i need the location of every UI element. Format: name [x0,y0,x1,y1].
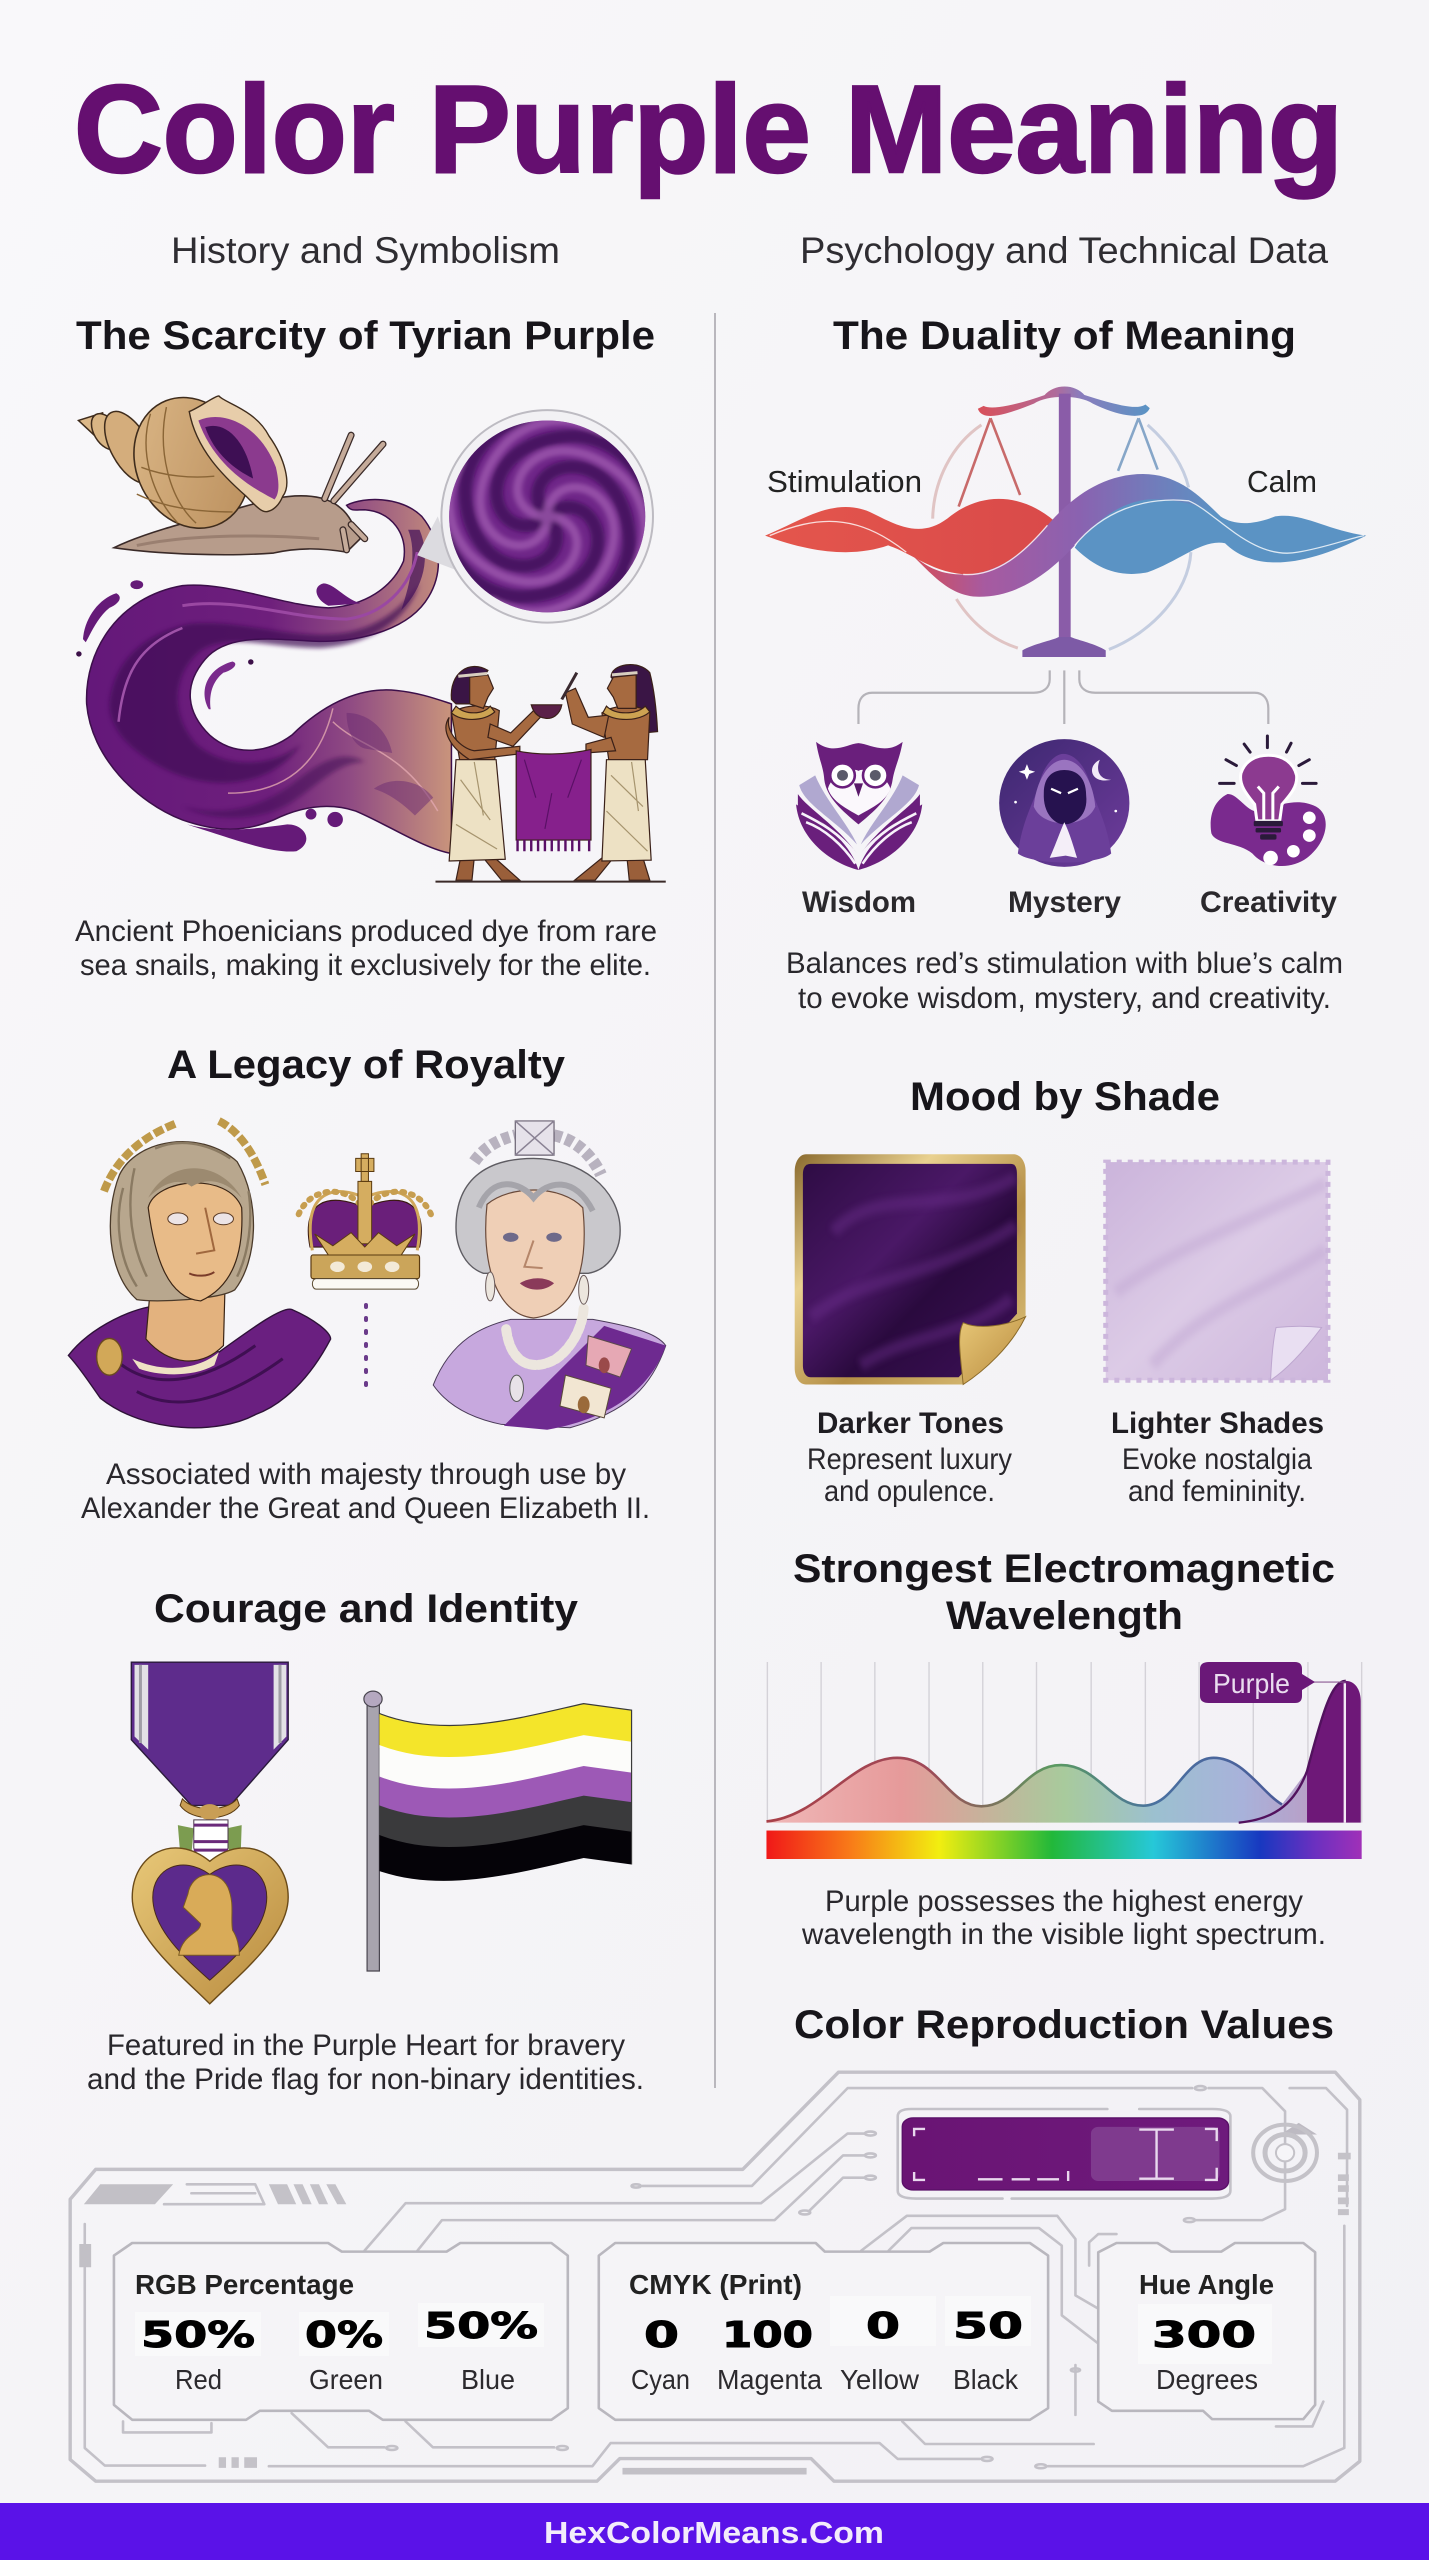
caption: lighter shades: Evoke nostalgia [1122,1443,1312,1476]
card label: RGB Percentage [135,2269,354,2300]
value: cyan: 0 [644,2315,679,2356]
card: hue angle [1098,2243,1315,2419]
display: purple swatch screen [902,2118,1229,2190]
heading: mood: Mood by Shade [910,1075,1220,1119]
heading: wavelength line 2: Wavelength [946,1594,1183,1638]
caption: darker tones: Represent luxury [807,1443,1012,1476]
body text: Phoenicians: Ancient Phoenicians produced dye from rare [75,915,657,948]
body text: balance: Balances red’s stimulation with blue’s calm [786,947,1343,980]
heading: royalty: A Legacy of Royalty [167,1043,566,1087]
purple cloth [516,749,591,851]
card outline [1098,2243,1315,2419]
card outline [114,2243,568,2420]
value: hue: Degrees [1156,2364,1258,2395]
callout: purple label: Purple [1213,1668,1290,1699]
value: blue: 50% [424,2306,538,2347]
icon: bulb and palette (creativity) [1211,736,1326,866]
purple band [906,474,1220,597]
connectors to traits [858,670,1268,724]
value: blue: Blue [461,2364,515,2395]
illustration: Queen Elizabeth II [433,1121,666,1430]
heading: duality: The Duality of Meaning [833,314,1296,358]
bowl [531,705,562,718]
caption: darker tones [807,1407,1012,1508]
panel: wavelength [766,1547,1362,1951]
value: yellow: 0 [866,2306,900,2347]
value: magenta: 100 [722,2315,813,2356]
card: RGB percentage [114,2243,568,2420]
card outline [599,2243,1048,2420]
chart: visible spectrum curve [766,1662,1362,1859]
ground line [435,881,666,883]
value: red: Red [175,2364,222,2395]
magnified dye swatch [417,409,654,624]
swatch: light [1106,1162,1328,1380]
value: green [299,2312,389,2395]
heading: wavelength: Strongest Electromagnetic [793,1547,1335,1591]
panel: color reproduction values [70,2003,1360,2481]
card: CMYK [599,2243,1048,2420]
value: green: Green [309,2364,383,2395]
caption: lighter shades: Lighter Shades [1111,1407,1324,1440]
icon: crown [299,1154,431,1289]
body text: Phoenicians: sea snails, making it exclusively for the elite. [80,949,651,982]
illustration: snail, dye and Phoenicians [76,380,676,882]
value: cyan: Cyan [631,2364,690,2395]
heading: scarcity: The Scarcity of Tyrian Purple [76,314,655,358]
value: hue: 300 [1152,2315,1256,2356]
value: black [945,2296,1031,2395]
snail [78,380,383,555]
icon: Purple Heart medal [131,1662,288,2004]
column divider [714,313,716,2088]
panel: mood by shade [795,1075,1328,1508]
value: magenta: Magenta [717,2364,822,2395]
Phoenician figures and cloth [435,665,666,882]
label: calm: Calm [1247,464,1317,499]
swatch: dark [795,1154,1026,1385]
left column subtitle: History and Symbolism [171,230,560,271]
right column subtitle: Psychology and Technical Data [800,230,1328,271]
caption: lighter shades [1111,1407,1324,1508]
value: blue [418,2303,544,2395]
value: red: 50% [141,2315,255,2356]
callout: purple label [1200,1662,1315,1703]
value: black: 50 [953,2306,1023,2347]
card label: CMYK (Print) [629,2269,802,2300]
blue wave [1075,494,1366,574]
title: Color Purple Meaning [74,61,1343,199]
footer band [0,2503,1429,2560]
body text: bravery: and the Pride flag for non-binary identities. [87,2063,644,2096]
value: black: Black [953,2364,1019,2395]
caption: darker tones: Darker Tones [817,1407,1004,1440]
label: stimulation: Stimulation [767,464,922,499]
value: cyan [631,2315,690,2395]
panel: courage [87,1587,644,2096]
value: red [135,2312,261,2395]
splashes [76,580,360,851]
value: green: 0% [305,2315,383,2356]
illustration: Alexander the Great [68,1121,331,1428]
panel: Tyrian purple [75,314,676,982]
value: hue [1138,2304,1272,2395]
icon: owl (wisdom) [796,742,922,870]
dotted link [364,1305,368,1396]
body text: majesty: Associated with majesty through use by [106,1458,626,1491]
body text: balance: to evoke wisdom, mystery, and creativity. [798,982,1331,1015]
label: mystery: Mystery [1008,886,1121,919]
icon: non-binary flag [364,1691,632,1971]
body text: spectrum: wavelength in the visible light spectrum. [801,1918,1326,1951]
label: creativity: Creativity [1200,886,1337,919]
panel: duality [765,314,1366,1015]
right figure [562,665,658,880]
card label: Hue Angle [1139,2269,1274,2300]
value: magenta [717,2315,822,2395]
panel: royalty [68,1043,666,1525]
icon: hooded figure (mystery) [999,739,1129,867]
caption: lighter shades: and femininity. [1128,1475,1306,1508]
left figure [446,666,540,880]
circuit frame [70,2072,1360,2481]
heading: courage: Courage and Identity [154,1587,579,1631]
body text: majesty: Alexander the Great and Queen Elizabeth II. [81,1492,650,1525]
caption: darker tones: and opulence. [824,1475,995,1508]
value: yellow [830,2296,936,2395]
body text: spectrum: Purple possesses the highest energy [825,1885,1303,1918]
heading: reproduction: Color Reproduction Values [794,2003,1334,2047]
dye stream [87,500,451,853]
body text: bravery: Featured in the Purple Heart for bravery [107,2029,625,2062]
diagram: scale with ribbon [765,388,1366,657]
label: wisdom: Wisdom [802,886,916,919]
footer text: HexColorMeans.Com [544,2515,884,2550]
value: yellow: Yellow [840,2364,920,2395]
red wave [765,499,1054,574]
